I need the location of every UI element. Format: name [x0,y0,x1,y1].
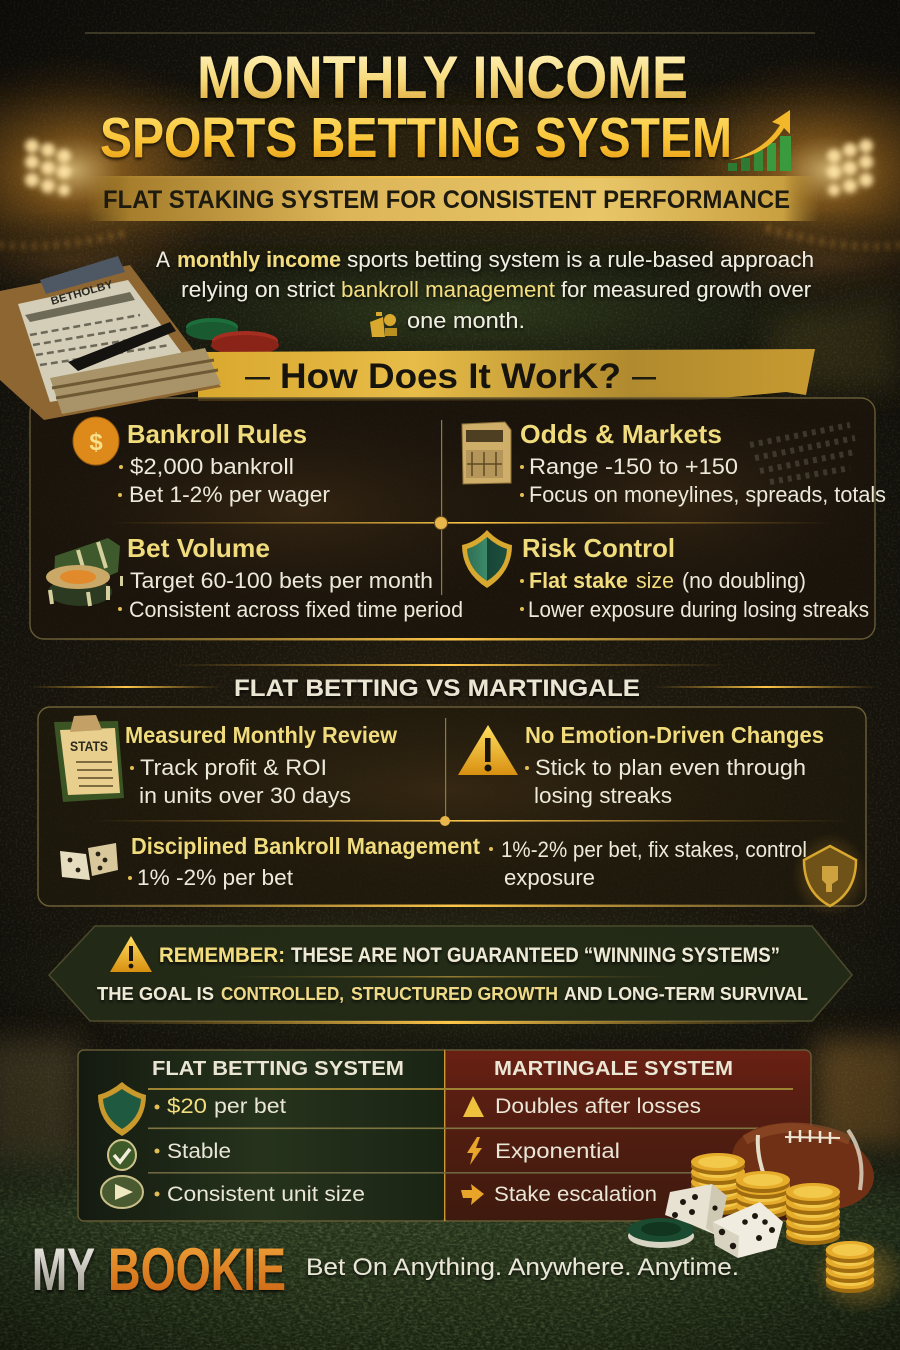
icon: cash and chip stack [46,538,123,606]
text: not guaranteed: THESE ARE NOT GUARANTEED “WINNING SYSTEMS” [291,944,780,967]
subtitle banner: FLAT STAKING SYSTEM FOR CONSISTENT PERFORMANCE [103,186,790,214]
intro paragraph: A [156,247,170,272]
card: no emotion-driven changes: losing streaks [534,783,672,808]
intro paragraph: monthly income [177,247,341,272]
icon: gold badge [792,833,868,917]
row: flat betting per bet [154,1095,286,1118]
icon: play button [101,1176,143,1208]
icon: arrow [461,1184,484,1205]
logo: my bookie: BOOKIE [108,1236,286,1303]
row: stable: Stable [167,1140,231,1163]
stadium floodlight right [827,139,873,196]
text: the goal: STRUCTURED GROWTH [351,983,558,1004]
card: no emotion-driven changes [525,722,824,808]
card: disciplined bankroll management: 1% -2% per bet [137,865,293,890]
card: disciplined bankroll management [128,833,807,890]
card: bet volume [118,533,463,622]
icon: rising arrow and green bars [728,110,791,171]
icon: clipboard with betslip, pen and cash [0,256,221,420]
card: measured monthly review: in units over 30 days [139,783,351,808]
intro paragraph: sports betting system is a rule-based approach [347,247,814,272]
card: bet volume: Consistent across fixed time period [129,597,463,622]
card: bankroll rules: $2,000 bankroll [130,454,294,479]
text: the goal: CONTROLLED, [221,983,344,1004]
row: consistent unit size: Consistent unit size [167,1183,365,1206]
icon: shield [98,1082,146,1136]
card: bet volume: Target 60-100 bets per month [130,568,433,593]
title: MONTHLY INCOME [197,44,688,111]
subtitle banner [86,176,820,221]
card: risk control: (no doubling) [682,568,806,593]
divider: vertical and horizontal with node [108,420,835,595]
icon: stats clipboard [54,715,124,802]
card: odds and markets [520,419,886,507]
card: risk control: Risk Control [522,533,675,563]
row: flat betting per bet: per bet [214,1095,286,1118]
how it works banner: How Does It WorK? [280,357,621,396]
card: bankroll rules: Bankroll Rules [127,419,307,449]
icon: dice [665,1184,783,1258]
divider with node [90,718,850,826]
tagline: Bet On Anything. Anywhere. Anytime. [306,1254,739,1281]
row: flat betting per bet: $20 [167,1095,207,1118]
card: disciplined bankroll management: exposure [504,865,595,890]
header: martingale system: MARTINGALE SYSTEM [494,1058,733,1080]
icon: poker chip [628,1218,694,1248]
icon: caution triangle [463,1096,484,1117]
logo: my bookie: MY [32,1236,95,1303]
icon: clipboard with betslip, pen and cash: BETHOLBY [50,279,115,308]
title [100,44,732,170]
intro paragraph: bankroll management [341,277,555,302]
card: risk control: size [636,568,674,593]
text: the goal: AND LONG-TERM SURVIVAL [564,983,808,1004]
card: odds and markets: Focus on moneylines, spreads, totals [529,482,886,507]
card: risk control: Lower exposure during losing streaks [528,597,869,622]
card: no emotion-driven changes: Stick to plan even through [535,755,806,780]
how it works banner [198,349,815,401]
intro paragraph: for measured growth over [561,277,811,302]
text: the goal [97,983,808,1004]
divider line [170,664,730,666]
card: bankroll rules [118,419,330,507]
icon: dollar coin: $ [89,429,103,456]
card: bankroll rules: Bet 1-2% per wager [129,482,330,507]
card: odds and markets: Odds & Markets [520,419,722,449]
header: flat betting system: FLAT BETTING SYSTEM [152,1058,404,1080]
icon: poker chips [186,318,279,355]
card: measured monthly review [125,722,397,808]
callout: remember [49,926,852,1024]
icon: dollar coin [73,417,119,465]
icon: shield [462,530,512,588]
card: no emotion-driven changes: No Emotion-Driven Changes [525,722,824,748]
panel: discipline [38,690,868,917]
icon: gold coin stacks [691,1153,900,1315]
comparison table [78,1050,811,1221]
intro paragraph: one month. [407,308,525,333]
section heading: flat betting vs martingale: FLAT BETTING VS MARTINGALE [234,675,640,702]
card: disciplined bankroll management: Disciplined Bankroll Management [131,833,480,859]
icon: warning triangle [110,936,152,972]
text: the goal: THE GOAL IS [97,983,214,1004]
icon: odds ticket [462,422,511,484]
logo: my bookie [32,1236,286,1303]
icon: small gold chart [370,312,397,337]
text: not guaranteed: REMEMBER: [159,944,285,967]
intro paragraph: relying on strict [181,277,335,302]
icon: lightning bolt [467,1137,482,1165]
icon: check mark [108,1140,136,1170]
icon: dice pair [60,843,118,880]
row: stake escalation: Stake escalation [494,1183,657,1206]
icon: football [724,1111,882,1223]
title: SPORTS BETTING SYSTEM [100,106,732,170]
card: odds and markets: Range -150 to +150 [529,454,738,479]
card: measured monthly review: Track profit & ROI [140,755,327,780]
card: risk control: Flat stake [529,568,628,593]
stadium floodlight left [25,139,71,196]
card: bet volume: Bet Volume [127,533,270,563]
panel: how it works [20,390,886,640]
card: disciplined bankroll management: 1%-2% per bet, fix stakes, control [501,837,807,862]
icon: warning triangle [458,725,518,775]
intro paragraph [156,247,814,333]
card: measured monthly review: Measured Monthly Review [125,722,397,748]
row: doubles after losses: Doubles after losses [495,1095,701,1118]
row: exponential: Exponential [495,1140,620,1163]
icon: stats clipboard: STATS [70,738,108,754]
card: risk control [520,533,869,622]
